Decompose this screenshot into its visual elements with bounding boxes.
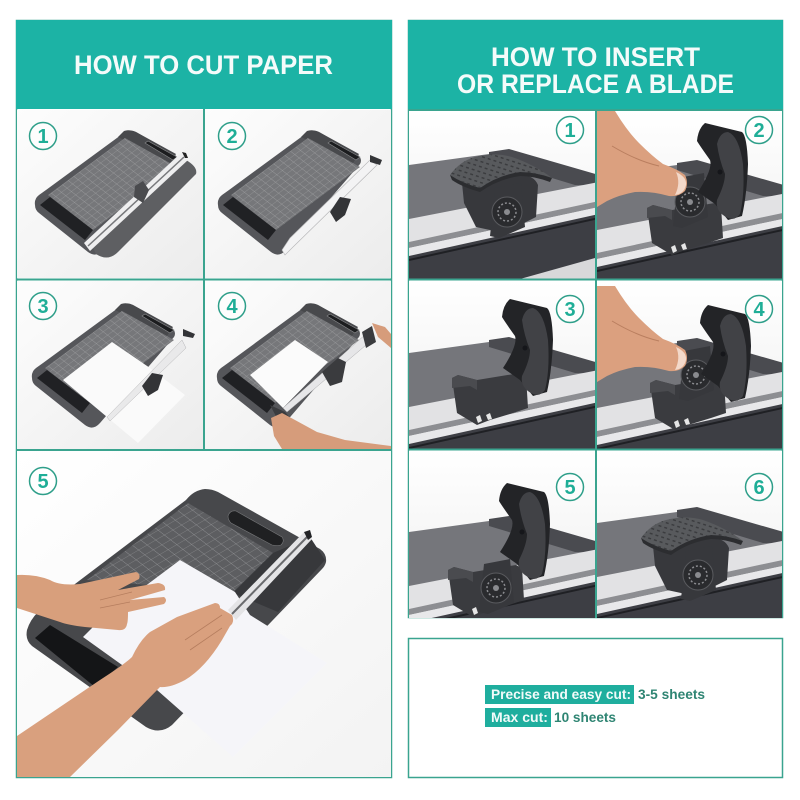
- step 3: paper placed on mat: [17, 281, 203, 449]
- panel: how to cut paper: [16, 20, 392, 778]
- step number 5: [30, 468, 56, 494]
- step number 4: 4: [753, 299, 765, 321]
- step number 6: 6: [753, 477, 765, 499]
- step number 5: [556, 474, 584, 500]
- icon: lower hand and arm: [17, 603, 233, 777]
- step number 3: [30, 292, 56, 320]
- icon: hand holding new blade: [597, 286, 687, 382]
- icon: hand holding blade: [597, 111, 687, 207]
- step number 5: 5: [564, 477, 576, 499]
- step number 1: [30, 122, 56, 150]
- paper sheet: [83, 560, 327, 757]
- panel: how to insert or replace a blade: [408, 20, 787, 706]
- step 1: cutter with rail closed: [17, 110, 203, 278]
- cutting rail: [228, 530, 312, 620]
- step number 3: 3: [37, 296, 49, 318]
- blade step 2: removing old blade: [597, 111, 782, 278]
- step number 2: 2: [226, 126, 238, 148]
- blade step 6: cutter head closed again: [597, 451, 782, 618]
- icon: hands: [271, 323, 391, 449]
- icon: upper hand: [17, 572, 166, 630]
- panel: cutting capacity: [408, 638, 782, 778]
- step number 1: 1: [564, 120, 576, 142]
- step number 6: [746, 474, 772, 500]
- step number 1: 1: [37, 126, 49, 148]
- spec: precise and easy cut: 3-5 sheets: [638, 686, 705, 702]
- step number 4: [746, 296, 772, 322]
- step 2: rail lifted away: [205, 110, 391, 278]
- spec: max cut: [485, 708, 616, 727]
- blade step 1: cutter head closed: [409, 111, 595, 278]
- heading banner: how to insert or replace a blade: OR REPLACE A BLADE: [457, 69, 734, 99]
- step 5: slicing paper close-up: [17, 451, 391, 777]
- step number 2: [218, 122, 246, 150]
- step number 2: [746, 116, 772, 144]
- spec: precise and easy cut: Precise and easy cut:: [491, 686, 631, 702]
- heading banner: how to cut paper: [16, 20, 392, 109]
- step number 2: 2: [753, 120, 765, 142]
- heading banner: how to insert or replace a blade: HOW TO INSERT: [491, 42, 700, 72]
- blade step 4: inserting new blade: [597, 281, 782, 448]
- step number 4: [218, 292, 246, 320]
- step number 3: [556, 296, 584, 322]
- blade step 5: blade seated in holder: [409, 451, 595, 618]
- heading banner: how to cut paper: HOW TO CUT PAPER: [74, 50, 333, 80]
- blade step 3: holder open and empty: [409, 281, 595, 448]
- step number 1: [556, 116, 584, 144]
- step number 4: 4: [226, 296, 238, 318]
- step number 3: 3: [564, 299, 576, 321]
- cutter body: [27, 489, 326, 731]
- step number 5: 5: [37, 471, 49, 493]
- heading banner: how to insert or replace a blade: [408, 20, 783, 109]
- spec: max cut: 10 sheets: [554, 709, 616, 725]
- spec: precise and easy cut: [485, 685, 705, 704]
- spec: max cut: Max cut:: [491, 709, 548, 725]
- step 4: rail pressed down with both hands: [205, 281, 391, 449]
